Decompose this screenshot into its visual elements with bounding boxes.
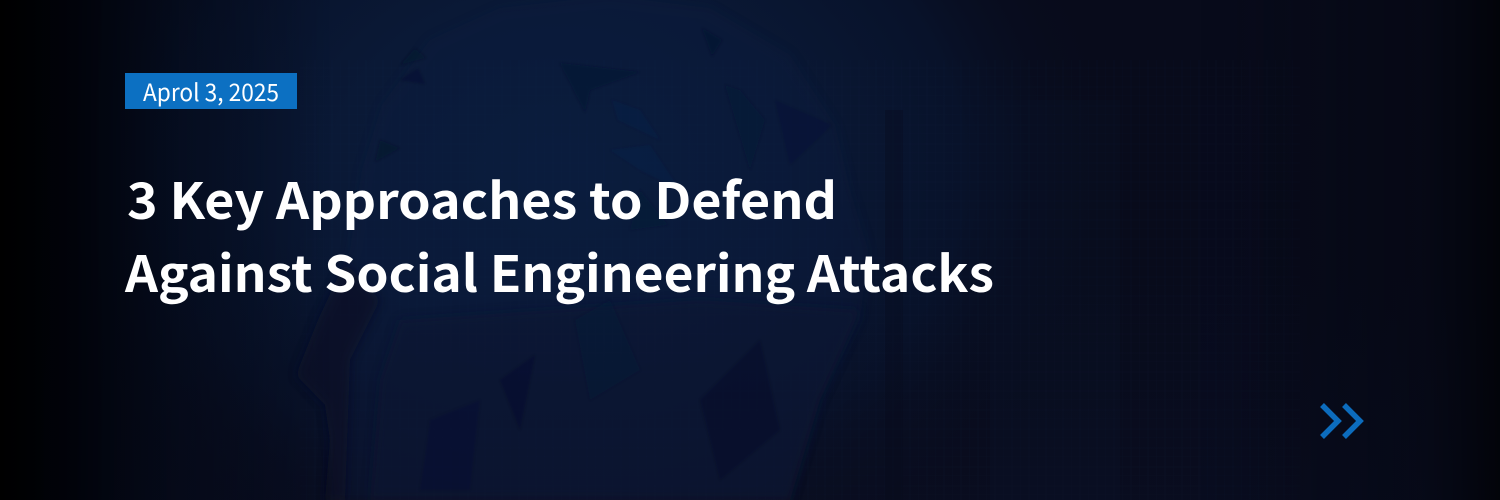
background: faint grid texture (300, 60, 1300, 500)
title: 3 Key Approaches to Defend (127, 162, 837, 234)
icon: double chevron arrow (1322, 405, 1360, 437)
illustration: faint polygonal head silhouette (296, 0, 868, 500)
title (124, 162, 994, 307)
date badge: Aprol 3, 2025 (143, 73, 279, 108)
title: Against Social Engineering Attacks (124, 235, 994, 307)
